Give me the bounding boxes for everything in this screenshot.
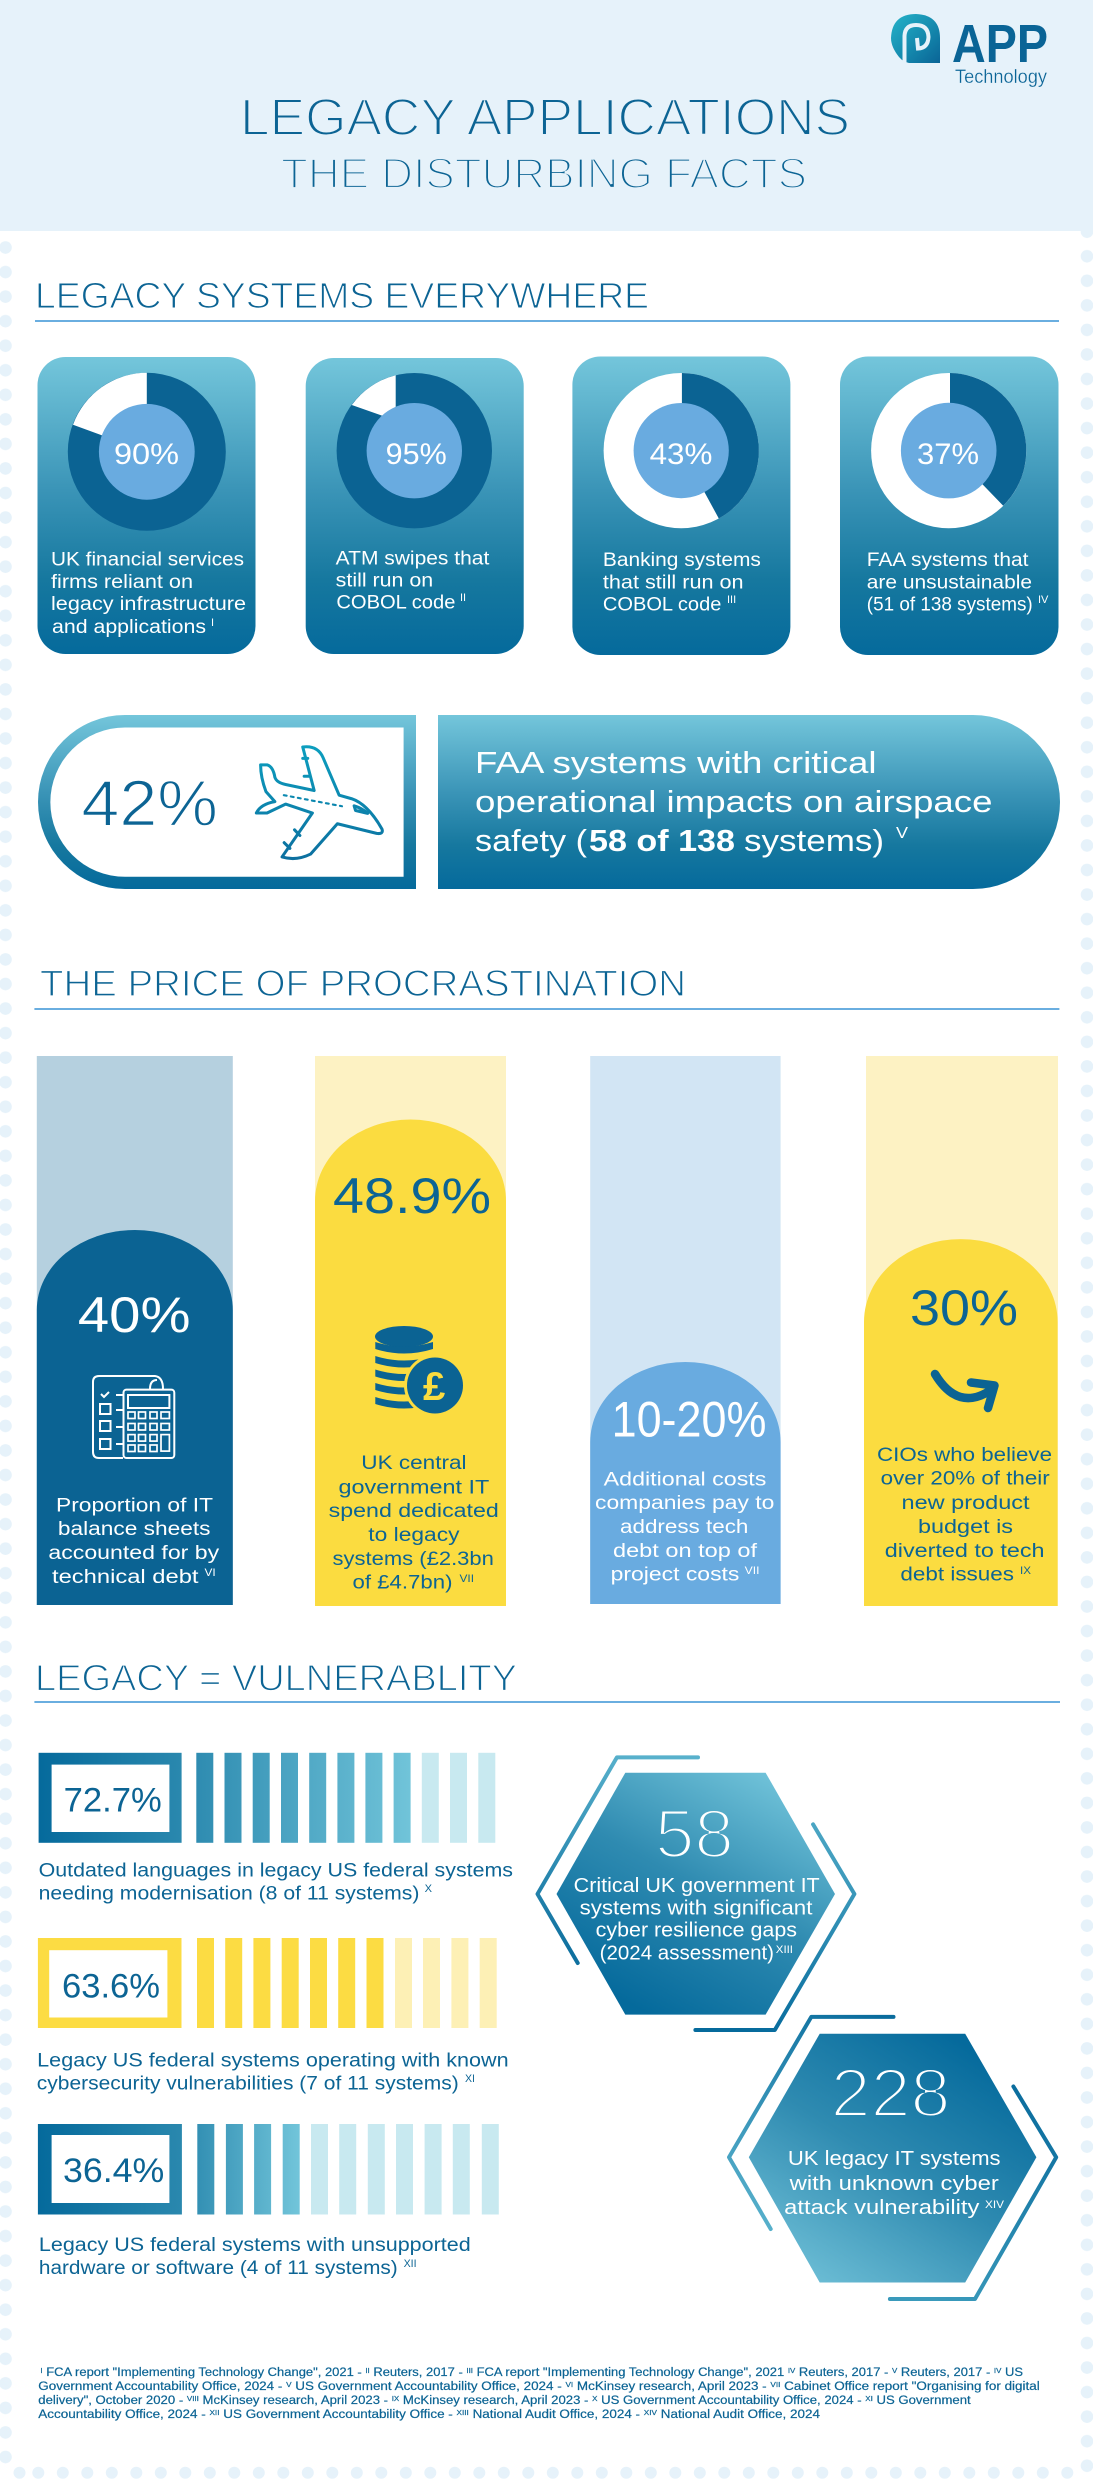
card text: are unsustainable xyxy=(867,572,1032,594)
card text: still run on xyxy=(336,570,433,591)
hexagon text xyxy=(784,2148,1005,2219)
donut chart 90% xyxy=(68,373,226,531)
card text xyxy=(51,550,246,638)
hexagon bracket right xyxy=(695,1824,854,2030)
bar caption: address tech xyxy=(620,1517,748,1538)
footnote sources: VIII xyxy=(187,2396,199,2403)
footnote sources: Reuters, 2017 - xyxy=(795,2367,892,2379)
title: LEGACY APPLICATIONS xyxy=(240,89,850,147)
hexagon text: XIII xyxy=(776,1944,793,1956)
footnote sources: XII xyxy=(209,2410,220,2417)
bar caption xyxy=(329,1453,499,1594)
footnote sources: V xyxy=(892,2368,898,2375)
icon: logo mark xyxy=(891,14,940,63)
pill text: FAA systems with critical xyxy=(475,745,876,780)
hexagon text: (2024 assessment) xyxy=(600,1942,774,1964)
hexagon: 228 legacy systems xyxy=(729,2017,1056,2299)
bar caption: companies pay to xyxy=(595,1493,774,1514)
hexagon text xyxy=(574,1875,820,1964)
card text: Banking systems xyxy=(603,550,761,571)
hexagon text: Critical UK government IT xyxy=(574,1875,820,1897)
pill text: operational impacts on airspace xyxy=(475,784,992,819)
row caption: Outdated languages in legacy US federal systems xyxy=(39,1860,513,1882)
bar caption: of £4.7bn) xyxy=(352,1573,452,1594)
hexagon text: with unknown cyber xyxy=(789,2173,999,2195)
pill text xyxy=(475,745,992,858)
row caption: Legacy US federal systems operating with known xyxy=(37,2050,509,2071)
footnote sources: US Government xyxy=(873,2395,972,2407)
footnote sources: National Audit Office, 2024 xyxy=(657,2409,821,2421)
icon: pound coins xyxy=(375,1326,466,1416)
bar caption: accounted for by xyxy=(48,1543,220,1564)
panel: 43% card xyxy=(572,356,790,655)
footnote sources: National Audit Office, 2024 - xyxy=(469,2409,644,2421)
row caption: Legacy US federal systems with unsupported xyxy=(39,2235,471,2256)
row caption xyxy=(39,1860,513,1905)
footnote sources: US Government Accountability Office, 2024 - xyxy=(597,2395,865,2407)
hexagon text: systems with significant xyxy=(580,1897,813,1919)
footnote sources xyxy=(38,2367,1040,2421)
footnote sources: XIII xyxy=(457,2410,469,2417)
footnote sources: III xyxy=(466,2368,473,2375)
icon: diverted arrow xyxy=(935,1374,994,1408)
bar caption: government IT xyxy=(338,1478,490,1499)
card text xyxy=(336,548,490,614)
hexagon: 58 critical systems xyxy=(538,1757,854,2030)
donut chart 90%: 90% xyxy=(114,438,179,471)
card text: and applications xyxy=(52,617,206,638)
bar caption: technical debt xyxy=(52,1567,199,1588)
bar caption: new product xyxy=(902,1493,1030,1514)
bar caption: debt on top of xyxy=(613,1541,758,1562)
icon: aeroplane xyxy=(256,747,382,859)
card text: II xyxy=(460,592,466,604)
footnote sources: Cabinet Office report "Organising for digital xyxy=(780,2381,1040,2393)
footnote sources: IV xyxy=(994,2368,1002,2375)
footnote sources: delivery", October 2020 - xyxy=(38,2395,165,2407)
footnote sources: US Government Accountability Office - xyxy=(220,2409,457,2421)
30% figure: 30% xyxy=(910,1280,1018,1336)
footnote sources: II xyxy=(365,2368,370,2375)
footnote sources: VI xyxy=(565,2382,573,2389)
donut chart 37% xyxy=(871,373,1026,528)
card text: that still run on xyxy=(603,572,744,594)
8 of 11 bars xyxy=(196,1753,495,1843)
figure 58: 58 xyxy=(655,1796,734,1873)
row caption: cybersecurity vulnerabilities (7 of 11 systems) xyxy=(37,2074,459,2094)
panel: FAA critical impact pill xyxy=(438,715,1060,889)
48.9% figure: 48.9% xyxy=(333,1168,491,1224)
heading: legacy = vulnerability: LEGACY = VULNERABLITY xyxy=(35,1658,517,1698)
stat row: 63.6% xyxy=(37,1938,509,2094)
footnote sources: FCA report "Implementing Technology Change", 2021 xyxy=(473,2367,788,2379)
row caption: hardware or software (4 of 11 systems) xyxy=(39,2258,398,2279)
donut chart 95% xyxy=(337,373,492,528)
footnote sources: McKinsey research, April 2023 - xyxy=(573,2381,770,2393)
panel: 10-20% bar xyxy=(590,1056,781,1604)
footnote sources: FCA report "Implementing Technology Change", 2021 - xyxy=(43,2367,365,2379)
footnote sources: US Government Accountability Office, 2024 - xyxy=(292,2381,565,2393)
bar caption: systems (£2.3bn xyxy=(332,1549,494,1570)
bar caption xyxy=(48,1495,220,1588)
hexagon text: XIV xyxy=(985,2199,1005,2211)
7 of 11 bars xyxy=(197,1938,497,2028)
panel: 40% bar xyxy=(37,1056,233,1605)
panel: 37% card xyxy=(840,356,1058,655)
card text: IV xyxy=(1038,594,1049,606)
row caption xyxy=(39,2235,471,2279)
footnote sources: XI xyxy=(865,2396,873,2403)
panel: 48.9% bar xyxy=(315,1056,506,1606)
row caption xyxy=(37,2050,509,2094)
heading: the price of procrastination: THE PRICE OF PROCRASTINATION xyxy=(40,963,686,1004)
footnote sources: I xyxy=(40,2368,43,2375)
header background xyxy=(0,0,1093,231)
10-20% figure: 10-20% xyxy=(612,1391,766,1447)
logo wordmark: APP xyxy=(952,14,1048,74)
bar caption: IX xyxy=(1020,1565,1032,1577)
card text: firms reliant on xyxy=(51,572,193,593)
logo tagline: Technology xyxy=(955,67,1047,88)
card text: ATM swipes that xyxy=(336,548,490,569)
icon: calculator and checklist xyxy=(93,1376,174,1458)
4 of 11 bars xyxy=(197,2124,499,2214)
bar caption: balance sheets xyxy=(58,1519,211,1540)
36.4% figure: 36.4% xyxy=(63,2152,164,2190)
bar caption: over 20% of their xyxy=(881,1469,1050,1490)
footnote sources: Reuters, 2017 - xyxy=(370,2367,466,2379)
stat row: 36.4% xyxy=(38,2124,499,2279)
donut chart 43% xyxy=(604,373,759,528)
42% figure: 42% xyxy=(81,767,218,840)
pill text: systems) xyxy=(744,823,884,858)
subtitle: THE DISTURBING FACTS xyxy=(281,150,807,198)
hexagon text: attack vulnerability xyxy=(784,2197,979,2219)
pill text: safety ( xyxy=(475,823,588,858)
row caption: needing modernisation (8 of 11 systems) xyxy=(39,1884,419,1905)
panel: 30% bar xyxy=(864,1056,1058,1606)
footnote sources: X xyxy=(592,2396,598,2403)
footnote sources: VII xyxy=(770,2382,780,2389)
stat row: 72.7% xyxy=(39,1753,513,1905)
bar caption xyxy=(595,1470,774,1586)
bar caption: spend dedicated xyxy=(329,1501,499,1522)
footnote sources: McKinsey research, April 2023 - xyxy=(199,2395,392,2407)
40% figure: 40% xyxy=(78,1287,190,1343)
72.7% figure: 72.7% xyxy=(64,1782,162,1820)
63.6% figure: 63.6% xyxy=(62,1968,160,2006)
bar caption: Proportion of IT xyxy=(56,1495,213,1516)
bar caption: to legacy xyxy=(368,1525,460,1546)
hexagon bracket left xyxy=(729,2017,894,2229)
footnote sources: McKinsey research, April 2023 - xyxy=(399,2395,592,2407)
card text: FAA systems that xyxy=(867,550,1029,571)
card text: (51 of 138 systems) xyxy=(867,595,1033,616)
bar caption: VII xyxy=(745,1565,760,1577)
card text: COBOL code xyxy=(603,595,721,616)
footnote sources: Accountability Office, 2024 - xyxy=(38,2409,181,2421)
card text: COBOL code xyxy=(336,593,455,614)
figure 228: 228 xyxy=(831,2054,950,2131)
card text: legacy infrastructure xyxy=(51,594,246,615)
donut chart 95%: 95% xyxy=(386,438,447,471)
hexagon text: cyber resilience gaps xyxy=(596,1920,797,1942)
bar caption: diverted to tech xyxy=(885,1541,1044,1562)
footnote sources: Government Accountability Office, 2024 - xyxy=(38,2381,247,2393)
card text: III xyxy=(727,594,736,606)
panel: 95% card xyxy=(306,358,524,654)
bar caption xyxy=(877,1445,1052,1586)
footnote sources: Reuters, 2017 - xyxy=(897,2367,994,2379)
donut chart 37%: 37% xyxy=(917,438,979,471)
row caption: X xyxy=(425,1883,433,1895)
donut chart 43%: 43% xyxy=(650,438,712,471)
card text xyxy=(867,550,1049,616)
pill text: V xyxy=(896,825,908,842)
footnote sources: US xyxy=(1001,2367,1023,2379)
bar caption: project costs xyxy=(611,1565,739,1586)
logo: APP Technology xyxy=(891,14,1048,88)
bar caption: budget is xyxy=(918,1517,1013,1538)
footnote sources: IV xyxy=(788,2368,796,2375)
panel: 90% card xyxy=(38,357,256,654)
bar caption: Additional costs xyxy=(604,1470,766,1490)
bar caption: VII xyxy=(460,1573,474,1585)
bar caption: CIOs who believe xyxy=(877,1445,1052,1466)
hexagon bracket left xyxy=(538,1757,698,1963)
hexagon bracket right xyxy=(890,2086,1056,2299)
pill text: 58 of 138 xyxy=(589,823,735,858)
footnote sources: IX xyxy=(392,2396,400,2403)
card text xyxy=(603,550,761,616)
card text: UK financial services xyxy=(51,550,244,571)
footnote sources: V xyxy=(286,2382,292,2389)
footnote sources: XIV xyxy=(644,2410,657,2417)
row caption: XI xyxy=(465,2073,475,2085)
bar caption: UK central xyxy=(361,1453,466,1474)
icon: pound coins: £ xyxy=(423,1365,445,1409)
bar caption: VI xyxy=(204,1567,216,1579)
panel: 42% pill xyxy=(38,715,416,889)
row caption: XII xyxy=(404,2258,417,2270)
card text: I xyxy=(211,617,214,629)
hexagon text: UK legacy IT systems xyxy=(788,2148,1001,2170)
bar caption: debt issues xyxy=(900,1565,1014,1586)
heading: legacy systems everywhere: LEGACY SYSTEMS EVERYWHERE xyxy=(35,275,649,316)
